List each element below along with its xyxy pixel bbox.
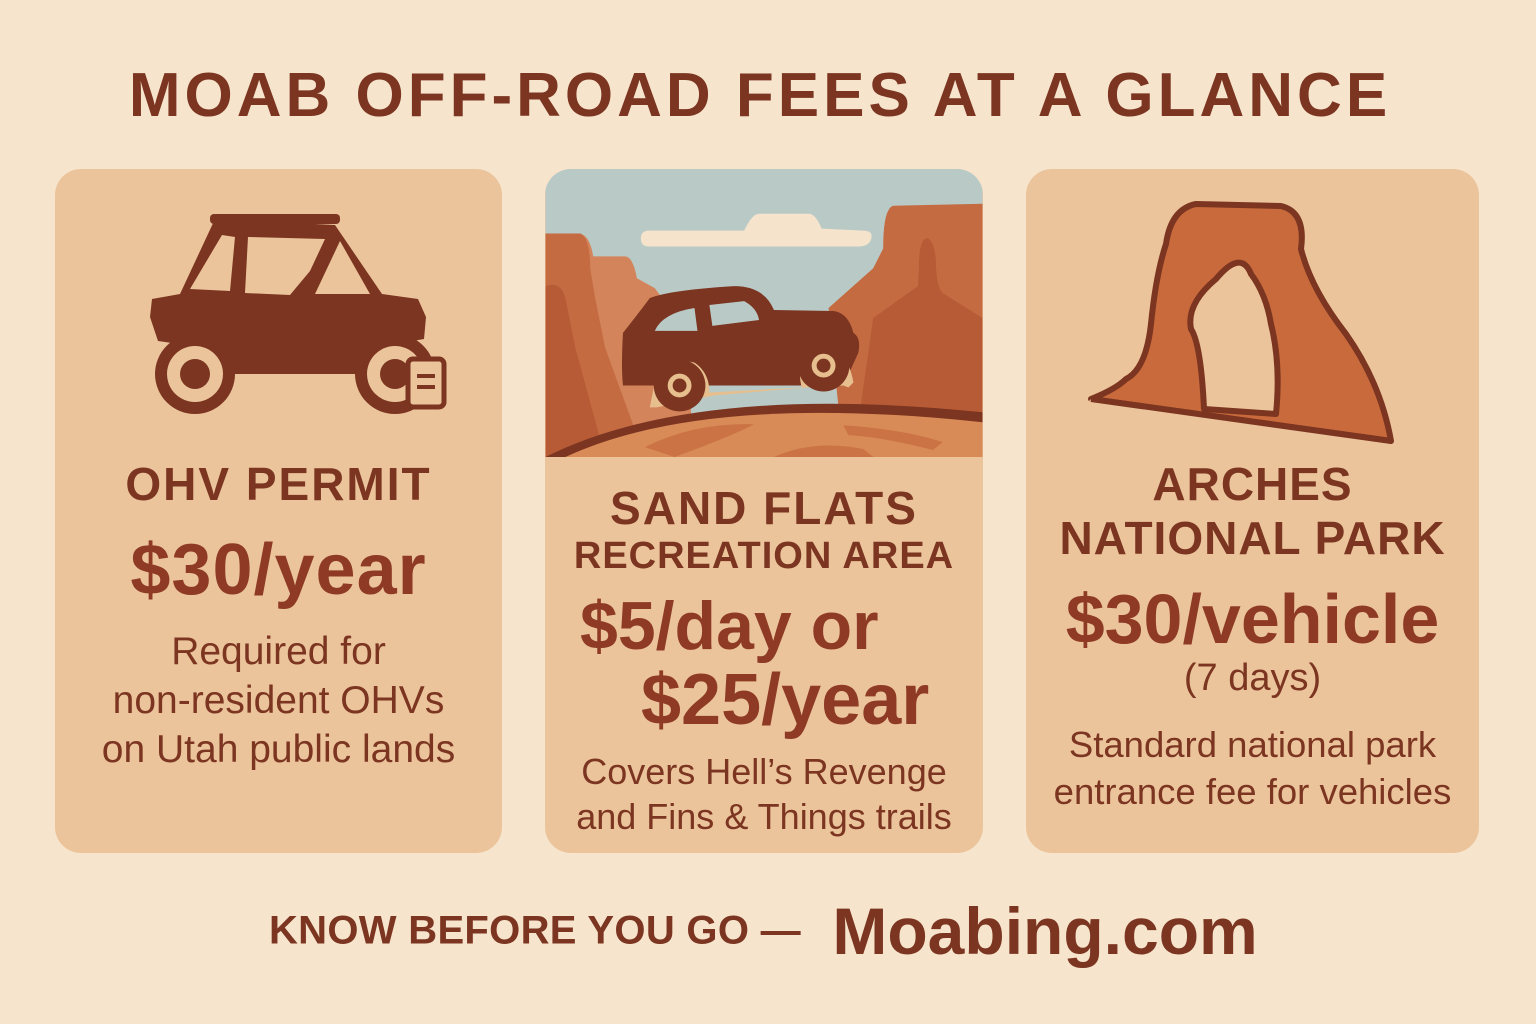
panel: Sand Flats: $25/year — [641, 660, 929, 740]
heading: SAND FLATS — [610, 482, 918, 534]
heading: ARCHES — [1152, 458, 1353, 510]
icon: Delicate Arch — [1088, 201, 1394, 444]
panel: Arches — [1026, 169, 1479, 853]
title: MOAB OFF-ROAD FEES AT A GLANCE — [129, 61, 1391, 130]
price: $5/day or — [580, 588, 879, 664]
description — [1054, 724, 1451, 812]
description: and Fins & Things trails — [576, 796, 952, 837]
description — [102, 630, 455, 771]
heading: NATIONAL PARK — [1059, 512, 1446, 564]
panel: OHV permit — [55, 169, 502, 853]
illustration: jeep on slickrock — [546, 169, 982, 457]
heading — [1059, 458, 1446, 564]
subheading: RECREATION AREA — [574, 535, 954, 577]
note: (7 days) — [1184, 657, 1321, 699]
description: non-resident OHVs — [113, 679, 444, 722]
description: on Utah public lands — [102, 728, 455, 771]
description: Standard national park — [1069, 724, 1436, 765]
heading: OHV PERMIT — [125, 458, 432, 510]
description: entrance fee for vehicles — [1054, 771, 1451, 812]
description — [576, 751, 952, 837]
description: Covers Hell’s Revenge — [581, 751, 947, 792]
footer: KNOW BEFORE YOU GO — Moabing.com — [269, 894, 1258, 968]
icon: UTV — [150, 214, 446, 414]
description: Required for — [171, 630, 386, 673]
panel: Sand Flats — [545, 169, 983, 853]
price: $30/year — [130, 530, 427, 610]
price: $30/vehicle — [1066, 580, 1439, 658]
